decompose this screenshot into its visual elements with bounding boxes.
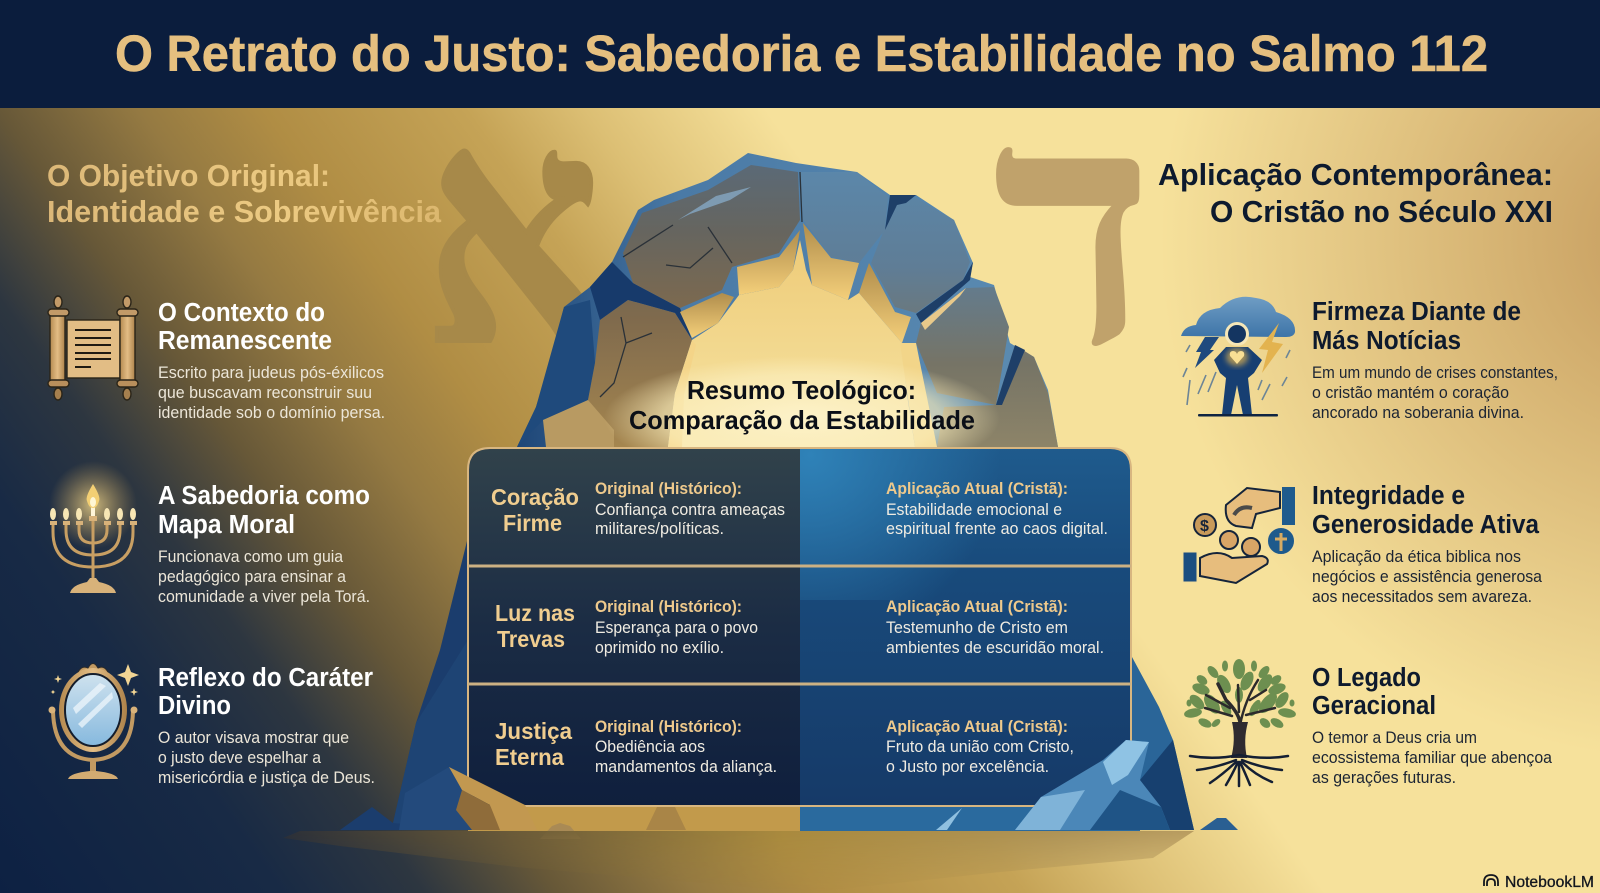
icon: tree with roots: [1183, 659, 1297, 786]
item text: sabedoria: A Sabedoria como: [158, 482, 370, 510]
item text: integridade: Aplicação da ética biblica nos: [1312, 548, 1521, 566]
item text: contexto: Remanescente: [158, 327, 332, 355]
right column: [800, 448, 1131, 806]
icon: menorah: [49, 461, 137, 593]
row: coração firme: Original (Histórico):: [595, 480, 742, 498]
item text: integridade: [1312, 482, 1543, 606]
dollar sign: $: [1200, 518, 1209, 535]
row: luz nas trevas: [495, 598, 1104, 657]
row: justiça eterna: Obediência aos: [595, 738, 705, 756]
row: luz nas trevas: oprimido no exílio.: [595, 639, 724, 657]
right foreground rock: [1015, 740, 1170, 830]
item text: legado: O temor a Deus cria um: [1312, 729, 1477, 747]
item text: reflexo: Divino: [158, 692, 231, 720]
row: justiça eterna: Original (Histórico):: [595, 718, 742, 736]
row: luz nas trevas: Original (Histórico):: [595, 598, 742, 616]
heading: objetivo original: O Objetivo Original:: [47, 158, 330, 193]
row: justiça eterna: Justiça: [495, 718, 573, 744]
item text: integridade: aos necessitados sem avareza.: [1312, 588, 1532, 606]
row: luz nas trevas: Testemunho de Cristo em: [886, 619, 1068, 637]
left rock: [340, 500, 480, 830]
row: justiça eterna: mandamentos da aliança.: [595, 758, 777, 776]
heading: aplicação contemporânea: [1158, 157, 1553, 229]
icon: person in storm: [1181, 297, 1295, 416]
small stone: [540, 823, 581, 839]
icon: torah scroll: [48, 296, 138, 400]
item text: firmeza: o cristão mantém o coração: [1312, 384, 1509, 402]
right stones: [800, 172, 1058, 447]
foreground rocks: [399, 740, 1238, 839]
row: luz nas trevas: Aplicação Atual (Cristã):: [886, 598, 1068, 616]
left stones: [588, 165, 800, 447]
row: luz nas trevas: Luz nas: [495, 600, 575, 626]
stone arch: [517, 153, 1058, 480]
table heading: [629, 375, 975, 435]
item text: sabedoria: pedagógico para ensinar a: [158, 568, 347, 586]
item text: contexto: [158, 299, 385, 422]
hebrew letter dalet: ד: [993, 49, 1154, 412]
dark left shadow: [590, 262, 692, 340]
item text: legado: [1312, 664, 1553, 787]
hebrew letter aleph: א: [424, 54, 600, 411]
row: justiça eterna: o Justo por excelência.: [886, 758, 1049, 776]
row: coração firme: Estabilidade emocional e: [886, 501, 1062, 519]
item text: reflexo: misericórdia e justiça de Deus.: [158, 769, 375, 787]
item text: contexto: que buscavam reconstruir suu: [158, 384, 372, 402]
item text: firmeza: Más Notícias: [1312, 327, 1461, 355]
left column: [468, 448, 800, 806]
header band: [0, 0, 1600, 108]
blue base below table: [800, 800, 1140, 831]
item text: legado: O Legado: [1312, 664, 1421, 692]
gold sliver: [921, 288, 966, 330]
icon: mirror: [48, 664, 139, 779]
right rock: [1100, 640, 1194, 830]
heading: aplicação contemporânea: O Cristão no Século XXI: [1210, 194, 1553, 229]
row: coração firme: espiritual frente ao caos digital.: [886, 520, 1108, 538]
item text: firmeza: Firmeza Diante de: [1312, 298, 1521, 326]
row: coração firme: Coração: [491, 484, 579, 510]
arch silhouette: [517, 153, 1058, 447]
item text: sabedoria: comunidade a viver pela Torá.: [158, 588, 370, 606]
dark cuts between stones: [885, 195, 1025, 405]
item text: sabedoria: Mapa Moral: [158, 511, 295, 539]
item text: legado: Geracional: [1312, 692, 1436, 720]
heading: objetivo original: [47, 158, 442, 229]
heading: aplicação contemporânea: Aplicação Contemporânea:: [1158, 157, 1553, 192]
gold underside of stones: [680, 223, 911, 343]
item text: legado: ecossistema familiar que abençoa: [1312, 749, 1553, 767]
lower left stone: [543, 400, 614, 447]
shard: [936, 808, 962, 830]
comparison table: [468, 448, 1131, 806]
item text: reflexo: o justo deve espelhar a: [158, 749, 322, 767]
row: justiça eterna: Fruto da união com Cristo,: [886, 738, 1074, 756]
title: O Retrato do Justo: Sabedoria e Estabilidade no Salmo 112: [115, 25, 1488, 82]
row: coração firme: Confiança contra ameaças: [595, 501, 785, 519]
stone highlight: [678, 187, 751, 220]
gold base below table: [468, 800, 800, 831]
heading glow: [604, 356, 1000, 480]
row: justiça eterna: Eterna: [495, 744, 565, 770]
row: luz nas trevas: Esperança para o povo: [595, 619, 758, 637]
right column: [1158, 157, 1558, 787]
item text: legado: as gerações futuras.: [1312, 769, 1456, 787]
item text: reflexo: O autor visava mostrar que: [158, 729, 349, 747]
row: coração firme: militares/políticas.: [595, 520, 724, 538]
item text: integridade: Generosidade Ativa: [1312, 511, 1540, 539]
rocks behind table: [340, 500, 1194, 831]
arch opening light: [668, 240, 915, 447]
ground shadow: [284, 831, 1194, 872]
item text: contexto: O Contexto do: [158, 299, 325, 327]
row: coração firme: Aplicação Atual (Cristã):: [886, 480, 1068, 498]
item text: reflexo: [158, 664, 375, 787]
table heading: Comparação da Estabilidade: [629, 405, 975, 435]
item text: sabedoria: Funcionava como um guia: [158, 548, 344, 566]
notebooklm logo: NotebookLM: [1505, 874, 1594, 891]
heading: objetivo original: Identidade e Sobrevivência: [47, 194, 442, 229]
row: coração firme: [491, 480, 1108, 538]
item text: firmeza: [1312, 298, 1558, 422]
row: justiça eterna: Aplicação Atual (Cristã):: [886, 718, 1068, 736]
item text: contexto: Escrito para judeus pós-éxilicos: [158, 364, 384, 382]
left foreground rock: [399, 767, 490, 830]
item text: reflexo: Reflexo do Caráter: [158, 664, 373, 692]
table heading: Resumo Teológico:: [687, 375, 916, 405]
item text: integridade: Integridade e: [1312, 482, 1465, 510]
item text: sabedoria: [158, 482, 370, 606]
item text: contexto: identidade sob o domínio persa.: [158, 404, 385, 422]
right small rock: [1200, 818, 1238, 830]
stone cracks: [600, 172, 802, 397]
row: coração firme: Firme: [503, 510, 562, 536]
row: luz nas trevas: Trevas: [497, 626, 565, 652]
left column: [47, 158, 442, 787]
row: justiça eterna: [495, 718, 1074, 776]
icon: giving hands: [1183, 487, 1295, 583]
row: luz nas trevas: ambientes de escuridão moral.: [886, 639, 1104, 657]
item text: firmeza: Em um mundo de crises constantes,: [1312, 364, 1558, 382]
item text: firmeza: ancorado na soberania divina.: [1312, 404, 1524, 422]
table frame: [468, 448, 1131, 806]
item text: integridade: negócios e assistência generosa: [1312, 568, 1543, 586]
